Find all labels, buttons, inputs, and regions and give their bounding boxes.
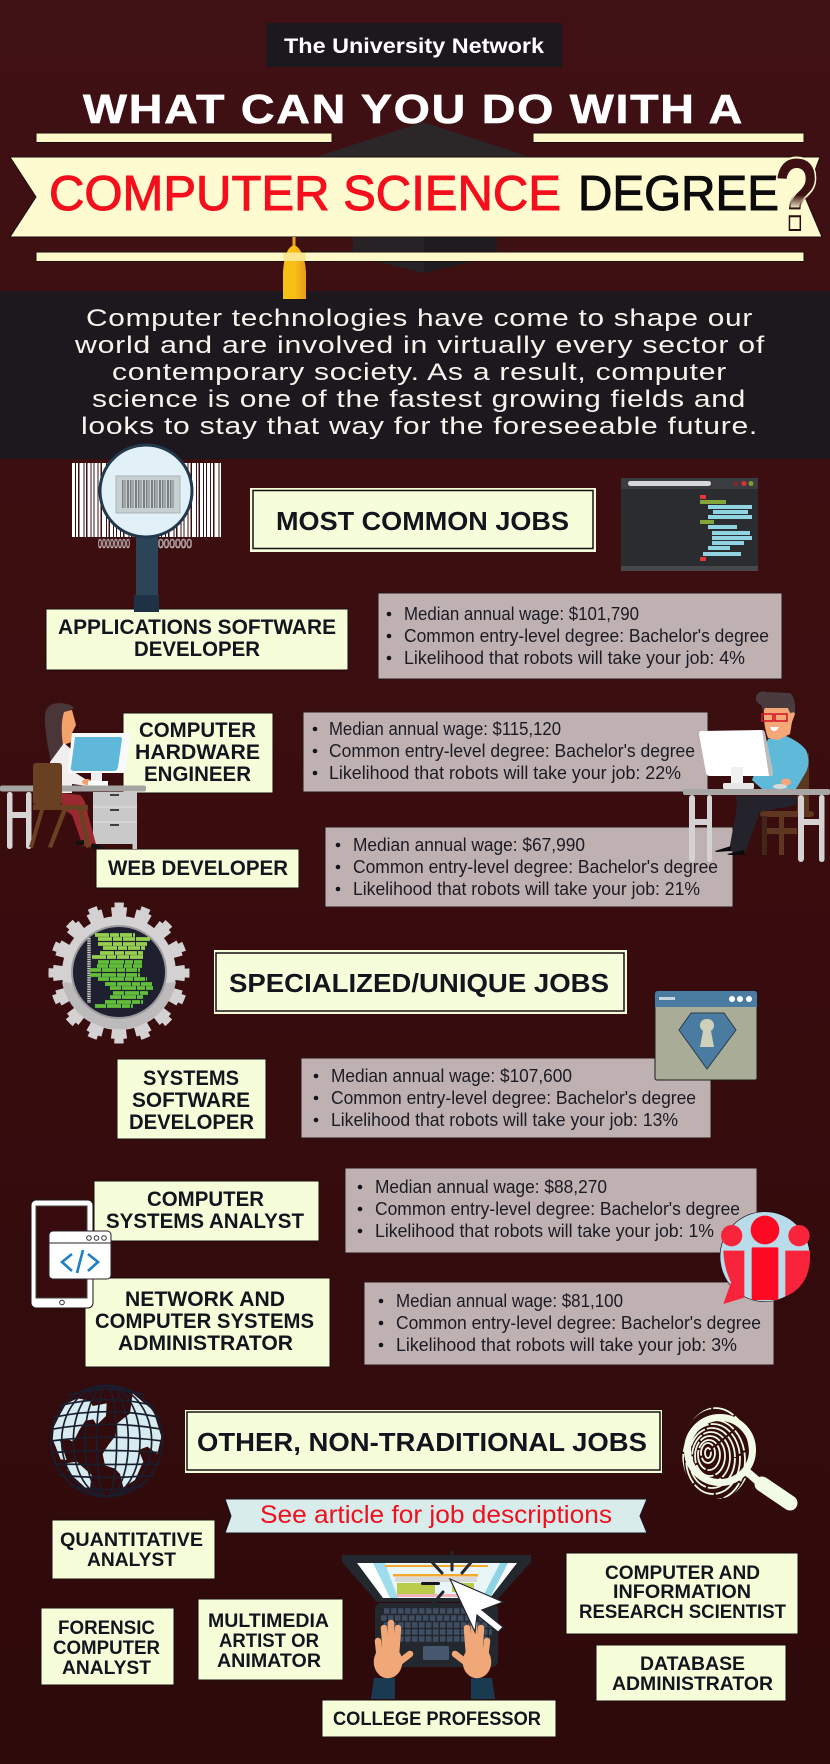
title banner (10, 137, 822, 253)
icon: cap tassel (283, 237, 306, 299)
chair (760, 753, 814, 855)
hair (45, 703, 74, 762)
stats: web developer: Likelihood that robots will take your job: 21% (353, 879, 700, 899)
icon: wireframe globe (50, 1384, 164, 1498)
face (62, 710, 76, 745)
job: forensic computer analyst: ANALYST (62, 1658, 151, 1679)
job: college professor (322, 1700, 556, 1737)
job: applications software developer (46, 609, 348, 670)
icon: tablet with code window (31, 1200, 111, 1308)
illustration: woman at desk (0, 703, 146, 849)
job: computer systems analyst (94, 1181, 319, 1241)
stats: computer systems analyst: Median annual wage: $88,270 (375, 1177, 607, 1197)
badge: The University Network (266, 23, 562, 67)
job: multimedia artist or animator: ANIMATOR (217, 1651, 321, 1672)
stats: systems software developer: Median annual wage: $107,600 (331, 1066, 572, 1086)
icon: fingerprint magnifier (680, 1408, 790, 1503)
job: network and computer systems administrator: NETWORK AND (125, 1288, 285, 1311)
job: quantitative analyst: QUANTITATIVE (60, 1530, 203, 1551)
stats: applications software developer: Likelihood that robots will take your job: 4% (404, 648, 745, 668)
stats: computer hardware engineer: Likelihood that robots will take your job: 22% (329, 763, 681, 783)
sleeves (371, 1678, 395, 1699)
job: computer hardware engineer (123, 713, 273, 793)
stats: web developer: Median annual wage: $67,990 (353, 835, 585, 855)
job: computer and information research scientist: RESEARCH SCIENTIST (579, 1602, 786, 1623)
stats: applications software developer: Median annual wage: $101,790 (404, 604, 639, 624)
monitor (68, 733, 130, 773)
glasses (762, 714, 787, 721)
icon: team speech bubble (720, 1212, 810, 1304)
job: computer and information research scientist: COMPUTER AND (605, 1563, 760, 1584)
illustration: laptop with hands and cursor (342, 1552, 531, 1699)
smile (770, 727, 779, 731)
drawers (93, 792, 137, 844)
job: quantitative analyst (52, 1520, 215, 1579)
job: network and computer systems administrator: COMPUTER SYSTEMS (95, 1310, 314, 1333)
job: database administrator: DATABASE (640, 1654, 745, 1675)
computer science in red: COMPUTER SCIENCE (49, 167, 561, 221)
torso and arm (50, 743, 90, 793)
job: multimedia artist or animator (198, 1599, 343, 1680)
job: college professor: COLLEGE PROFESSOR (333, 1709, 541, 1730)
stats: computer hardware engineer (303, 712, 708, 792)
job: quantitative analyst: ANALYST (87, 1550, 176, 1571)
job: forensic computer analyst: FORENSIC (58, 1618, 155, 1639)
desktop (683, 789, 830, 795)
job: network and computer systems administrator (85, 1278, 330, 1367)
job: systems software developer (117, 1059, 266, 1139)
sweater (752, 736, 808, 789)
job: applications software developer: DEVELOPER (134, 638, 260, 661)
title line: what can you do with a: WHAT CAN YOU DO WITH A (83, 86, 744, 132)
job: computer hardware engineer: HARDWARE (135, 741, 260, 764)
graduation cap behind banner (316, 122, 530, 273)
stats: systems software developer (301, 1058, 711, 1138)
left hand (377, 1623, 410, 1675)
job: computer and information research scientist (566, 1553, 798, 1634)
stats: web developer: Common entry-level degree: Bachelor's degree (353, 857, 718, 877)
stats: network and computer systems administrator (364, 1282, 774, 1365)
hand (82, 779, 92, 785)
face (764, 708, 795, 740)
stats: network and computer systems administrator: Common entry-level degree: Bachelor's degree (396, 1313, 761, 1333)
laptop screen (357, 1563, 517, 1598)
heading: most common jobs (250, 488, 596, 552)
laptop lid (342, 1555, 531, 1602)
intro paragraph (74, 305, 765, 440)
stats: network and computer systems administrator: Median annual wage: $81,100 (396, 1291, 623, 1311)
job: forensic computer analyst (41, 1608, 174, 1685)
desktop (0, 786, 146, 792)
intro paragraph: looks to stay that way for the foreseeable future. (81, 413, 758, 440)
magnifier handle overlap on label (134, 600, 159, 612)
job: systems software developer: SYSTEMS (143, 1067, 239, 1090)
stats: network and computer systems administrator: Likelihood that robots will take your job: 3% (396, 1335, 737, 1355)
keys (381, 1611, 492, 1639)
hand and mouse (781, 778, 791, 786)
heading: specialized unique jobs (214, 950, 627, 1014)
job: systems software developer: DEVELOPER (129, 1111, 254, 1134)
stats: computer hardware engineer: Common entry-level degree: Bachelor's degree (329, 741, 695, 761)
desk legs (7, 792, 32, 849)
right hand (455, 1623, 488, 1675)
trousers and shoes (729, 796, 797, 853)
stats: computer systems analyst: Common entry-level degree: Bachelor's degree (375, 1199, 740, 1219)
monitor (699, 730, 773, 776)
stats: computer systems analyst: Likelihood that robots will take your job: 1% (375, 1221, 714, 1241)
stats: computer hardware engineer: Median annual wage: $115,120 (329, 719, 561, 739)
job: network and computer systems administrator: ADMINISTRATOR (118, 1332, 293, 1355)
illustration: man at desk (683, 692, 830, 862)
heading: specialized unique jobs: SPECIALIZED/UNIQUE JOBS (229, 968, 609, 998)
intro paragraph: science is one of the fastest growing fields and (92, 386, 746, 413)
job: applications software developer: APPLICATIONS SOFTWARE (58, 616, 336, 639)
job: computer and information research scientist: INFORMATION (613, 1582, 751, 1603)
icon: security window (655, 991, 757, 1080)
click sparks (430, 1552, 473, 1605)
job: multimedia artist or animator: ARTIST OR (219, 1631, 319, 1652)
job: systems software developer: SOFTWARE (132, 1089, 250, 1112)
code bars (90, 935, 153, 1006)
degree in black: DEGREE (578, 167, 779, 221)
job: database administrator: ADMINISTRATOR (612, 1674, 773, 1695)
desk legs (689, 795, 824, 862)
trousers and shoes (62, 793, 96, 846)
heading: other non-traditional jobs: OTHER, NON-TRADITIONAL JOBS (197, 1427, 647, 1457)
chair (29, 763, 91, 848)
cursor arrow (450, 1579, 503, 1632)
touchpad (423, 1646, 449, 1660)
job: multimedia artist or animator: MULTIMEDIA (208, 1611, 329, 1632)
intro paragraph: world and are involved in virtually every sector of (74, 332, 765, 359)
intro band background (0, 291, 830, 459)
icon: barcode under magnifier (72, 445, 221, 612)
icon: code editor window (621, 478, 758, 571)
icon: gear with code screen (53, 907, 185, 1039)
magnifier handle (136, 535, 158, 597)
stats: systems software developer: Likelihood that robots will take your job: 13% (331, 1110, 678, 1130)
hair (756, 692, 795, 713)
icon: barcode under magnifier: 00000000 (98, 536, 130, 551)
ribbon: see article for job descriptions (225, 1499, 647, 1533)
job: computer systems analyst: COMPUTER (147, 1188, 264, 1211)
intro paragraph: contemporary society. As a result, computer (112, 359, 727, 386)
job: web developer (96, 849, 299, 888)
stats: systems software developer: Common entry-level degree: Bachelor's degree (331, 1088, 696, 1108)
decorative cream bars (36, 133, 804, 262)
stats: web developer (325, 827, 733, 907)
job: forensic computer analyst: COMPUTER (53, 1638, 160, 1659)
stats: applications software developer (378, 593, 782, 679)
stats: applications software developer: Common entry-level degree: Bachelor's degree (404, 626, 769, 646)
heading: other non-traditional jobs (185, 1410, 662, 1473)
job: database administrator (596, 1645, 786, 1701)
job: computer systems analyst: SYSTEMS ANALYST (106, 1210, 304, 1233)
ribbon: see article for job descriptions: See article for job descriptions (260, 1501, 612, 1529)
heading: most common jobs: MOST COMMON JOBS (276, 506, 569, 536)
intro paragraph: Computer technologies have come to shape our (86, 305, 753, 332)
job: computer hardware engineer: COMPUTER (139, 719, 256, 742)
job: computer hardware engineer: ENGINEER (144, 763, 251, 786)
keyboard base (375, 1603, 498, 1667)
icon: barcode under magnifier: 000000 (158, 536, 192, 551)
magnifier lens (100, 445, 192, 537)
stats: computer systems analyst (345, 1168, 757, 1253)
job: web developer: WEB DEVELOPER (108, 857, 288, 880)
badge: The University Network: The University Network (284, 35, 544, 58)
